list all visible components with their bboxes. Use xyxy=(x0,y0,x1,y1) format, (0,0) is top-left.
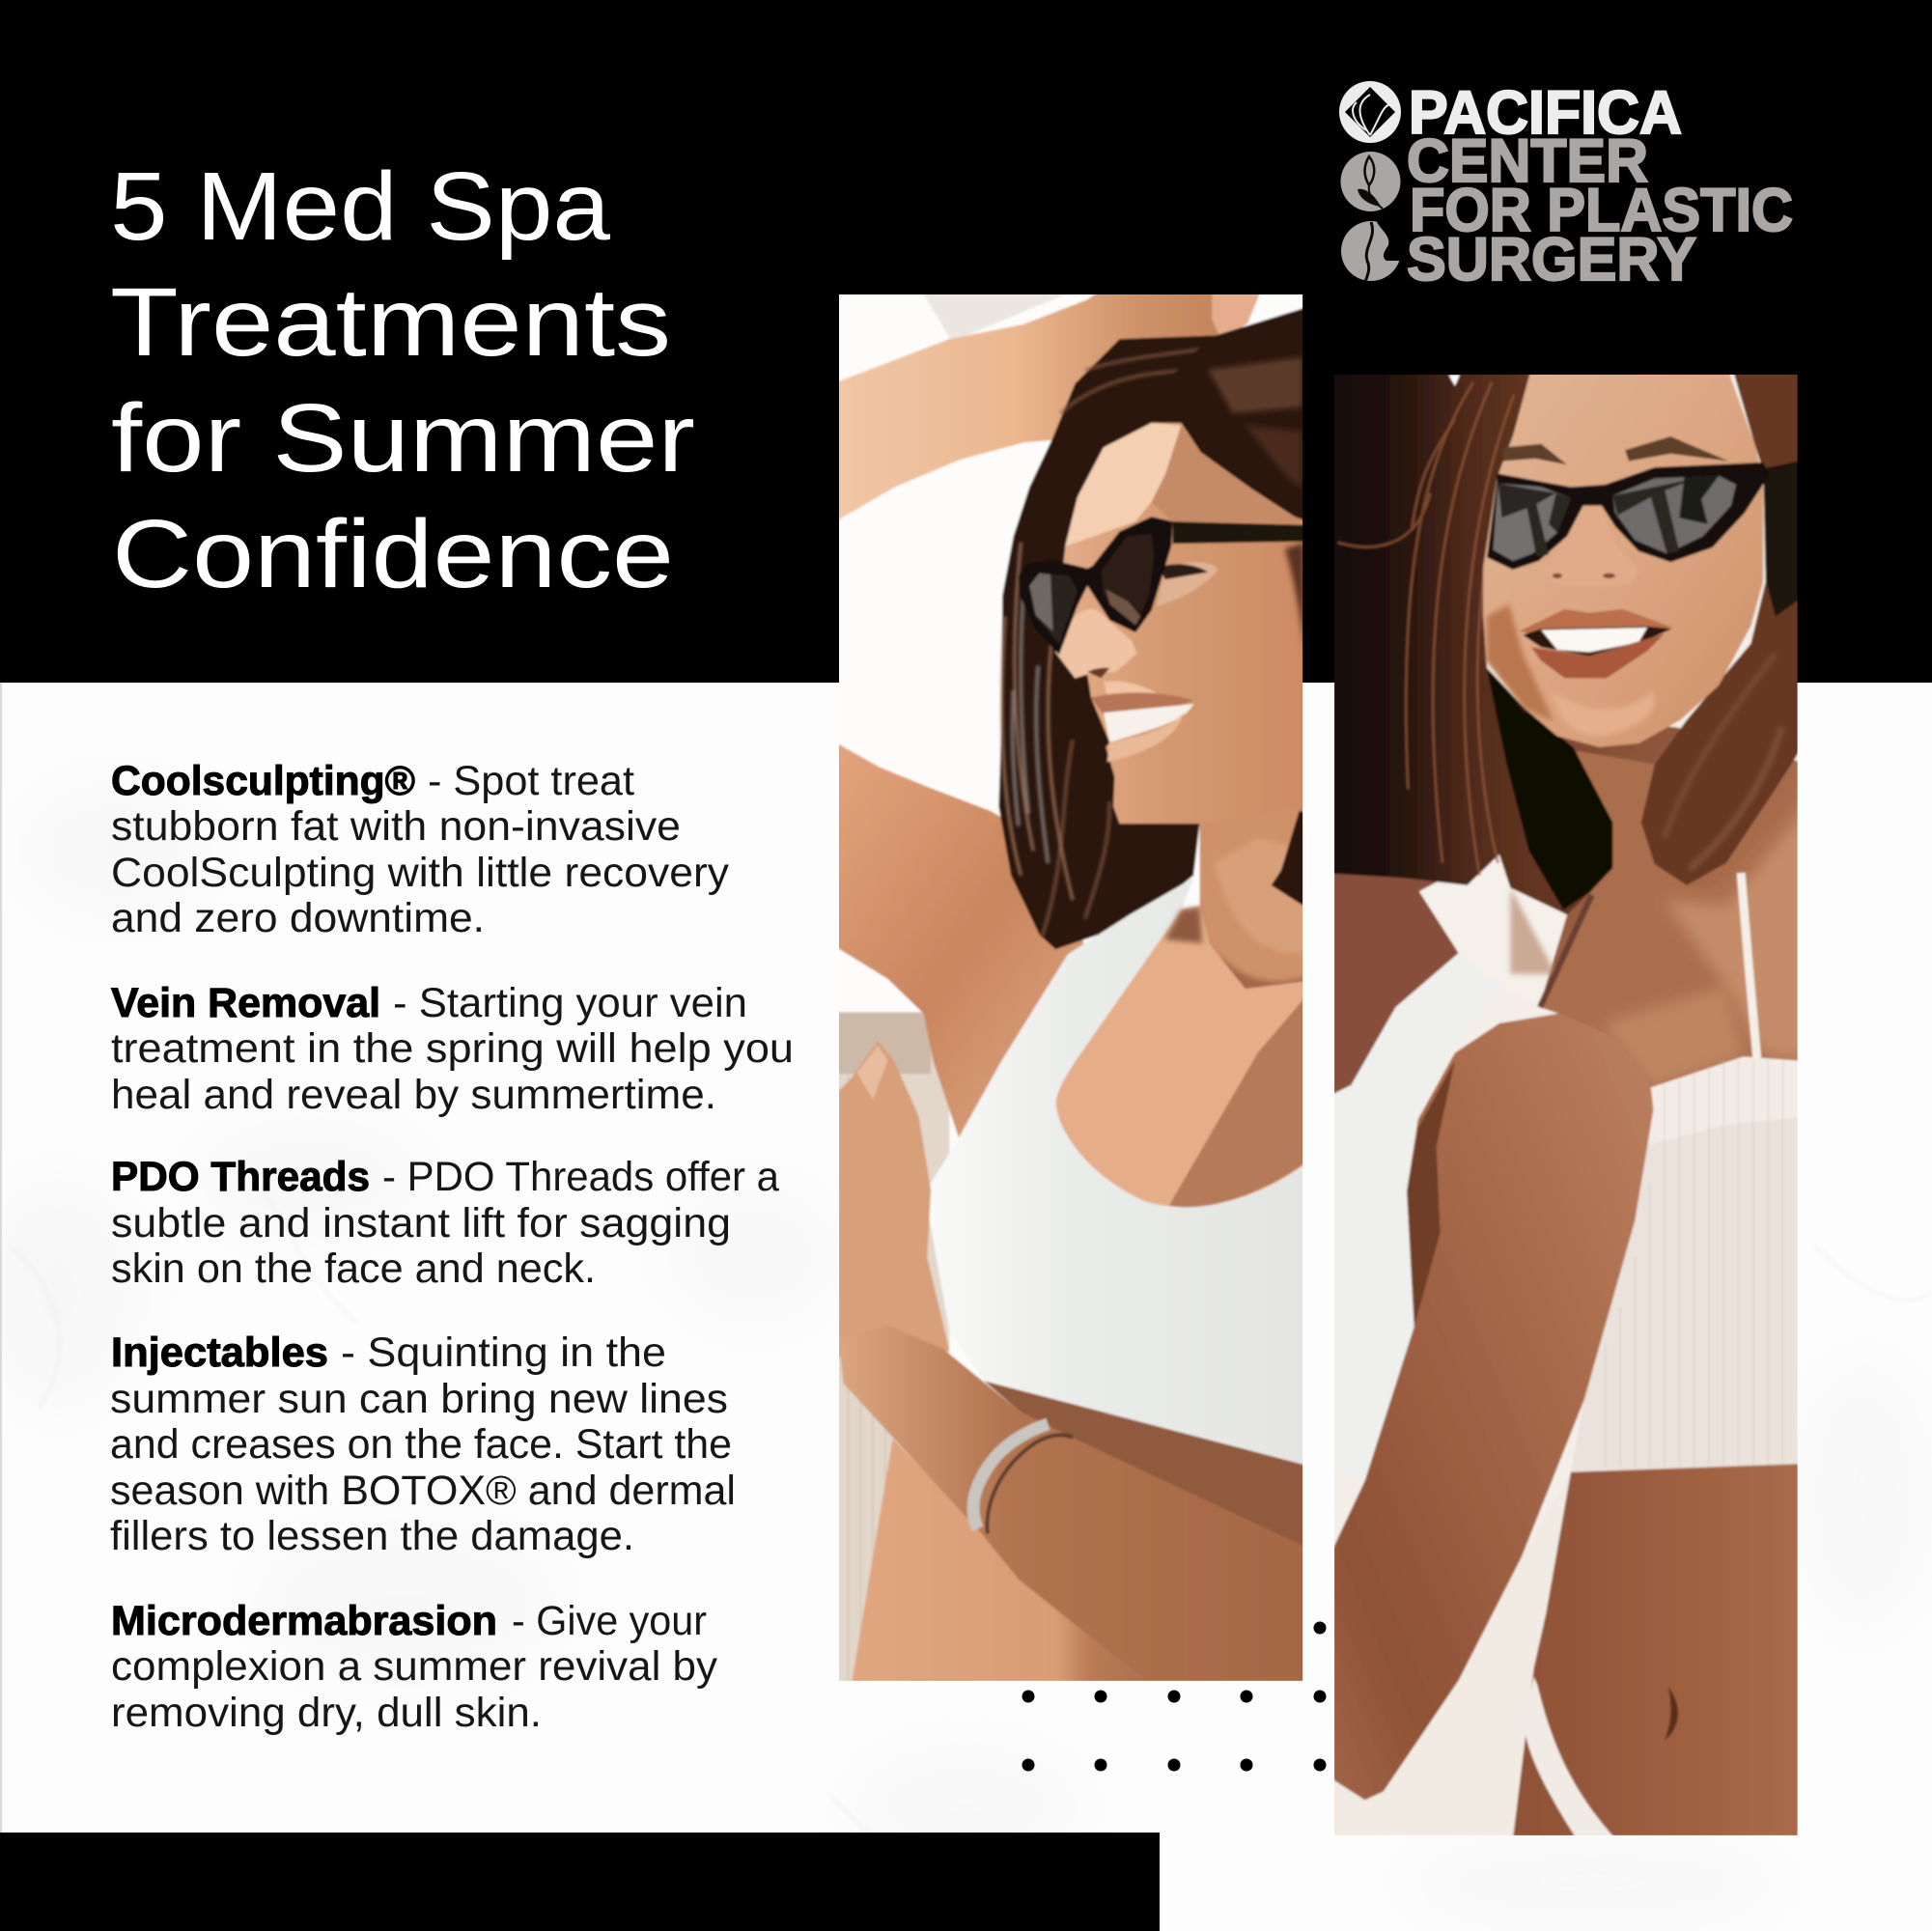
item: Injectables: season with BOTOX® and dermal xyxy=(110,1469,736,1514)
item: PDO Threads: subtle and instant lift for sagging xyxy=(111,1201,731,1246)
item: Coolsculpting: Coolsculpting® xyxy=(111,759,415,804)
icon: leaf emblem xyxy=(1340,152,1400,211)
navel xyxy=(1665,1687,1678,1741)
item: Vein Removal: heal and reveal by summertime. xyxy=(111,1073,716,1118)
title: Confidence xyxy=(112,500,674,608)
item: Vein Removal xyxy=(111,981,794,1118)
skin behind hair xyxy=(1322,869,1479,1116)
item: Microdermabrasion: removing dry, dull skin. xyxy=(111,1691,542,1736)
item: Injectables: and creases on the face. Start the xyxy=(110,1422,732,1468)
item: Coolsculpting xyxy=(111,759,730,941)
chest xyxy=(1056,905,1314,1207)
cheek shadow under eye xyxy=(1157,562,1218,606)
title: for Summer xyxy=(111,384,695,492)
icon: profile emblem xyxy=(1341,221,1403,282)
dot grid xyxy=(1022,1622,1327,1771)
thigh xyxy=(851,1439,1147,1681)
lips and teeth xyxy=(1519,609,1673,678)
nose and mouth xyxy=(1055,609,1136,678)
hair xyxy=(998,303,1314,949)
icon: fan emblem xyxy=(1339,81,1401,143)
item: Microdermabrasion: Microdermabrasion xyxy=(111,1599,497,1644)
belly xyxy=(1512,1464,1810,1849)
underarm and torso xyxy=(839,743,1085,1138)
nose xyxy=(1545,508,1638,587)
white crop top xyxy=(925,878,1314,1479)
logo wordmark: PACIFICA xyxy=(1409,79,1682,147)
ribbed top xyxy=(1571,1056,1810,1472)
title xyxy=(110,153,695,608)
treatments list xyxy=(110,759,794,1736)
arm and shoulder xyxy=(1322,1014,1653,1800)
item: Microdermabrasion: complexion a summer revival by xyxy=(111,1644,718,1690)
face xyxy=(1483,364,1763,747)
bottom black bar xyxy=(0,1833,1160,1931)
photo: smiling woman facing camera with sunglasses xyxy=(1322,364,1810,1849)
item: Vein Removal: treatment in the spring will help you xyxy=(111,1026,794,1072)
torso under top xyxy=(983,1381,1303,1548)
chest and neck xyxy=(1503,715,1810,1109)
face xyxy=(1055,423,1314,824)
item: PDO Threads: skin on the face and neck. xyxy=(111,1246,596,1292)
logo: Pacifica Center for Plastic Surgery xyxy=(1339,79,1793,294)
item: Microdermabrasion: - Give your xyxy=(512,1599,707,1644)
logo wordmark xyxy=(1407,79,1793,294)
logo wordmark: FOR PLASTIC xyxy=(1410,177,1793,244)
logo wordmark: SURGERY xyxy=(1407,226,1696,294)
shirt under hair xyxy=(1419,847,1567,1009)
raised arm xyxy=(839,294,1220,521)
item: Injectables: - Squinting in the xyxy=(341,1330,666,1376)
white tank xyxy=(1322,953,1503,1485)
wall panel xyxy=(839,1050,950,1681)
necklace straps xyxy=(1741,873,1757,1058)
item: Coolsculpting: - Spot treat xyxy=(428,759,634,804)
hair xyxy=(1322,364,1612,915)
item: Coolsculpting: stubborn fat with non-invasive xyxy=(111,804,681,850)
item: Coolsculpting: and zero downtime. xyxy=(111,896,485,941)
photo: woman in profile with sunglasses xyxy=(826,284,1319,1696)
item: PDO Threads: PDO Threads xyxy=(111,1155,370,1200)
title: 5 Med Spa xyxy=(110,153,610,261)
item: PDO Threads xyxy=(111,1155,779,1292)
eyebrows xyxy=(1503,444,1567,464)
item: Coolsculpting: CoolSculpting with little recovery xyxy=(111,851,730,896)
item: Vein Removal: Vein Removal xyxy=(111,981,380,1026)
sunglasses xyxy=(1487,462,1769,570)
sunglasses xyxy=(1019,517,1314,655)
item: PDO Threads: - PDO Threads offer a xyxy=(382,1155,779,1200)
item: Injectables: summer sun can bring new lines xyxy=(110,1377,728,1422)
forearm xyxy=(838,1326,1314,1695)
logo wordmark: CENTER xyxy=(1407,127,1648,195)
right hair xyxy=(1641,364,1810,885)
title: Treatments xyxy=(110,268,671,377)
item: Vein Removal: - Starting your vein xyxy=(393,981,747,1026)
item: Injectables xyxy=(110,1330,736,1559)
item: Microdermabrasion xyxy=(111,1599,718,1736)
neck xyxy=(1197,806,1303,985)
hair highlights xyxy=(998,346,1200,938)
top black band xyxy=(0,0,1932,683)
item: Injectables: fillers to lessen the damage. xyxy=(110,1514,634,1559)
hand xyxy=(838,1041,949,1368)
item: Injectables: Injectables xyxy=(111,1330,328,1376)
lips and teeth xyxy=(1091,692,1193,762)
bracelet xyxy=(973,1424,1073,1534)
skirt xyxy=(1322,1472,1571,1849)
